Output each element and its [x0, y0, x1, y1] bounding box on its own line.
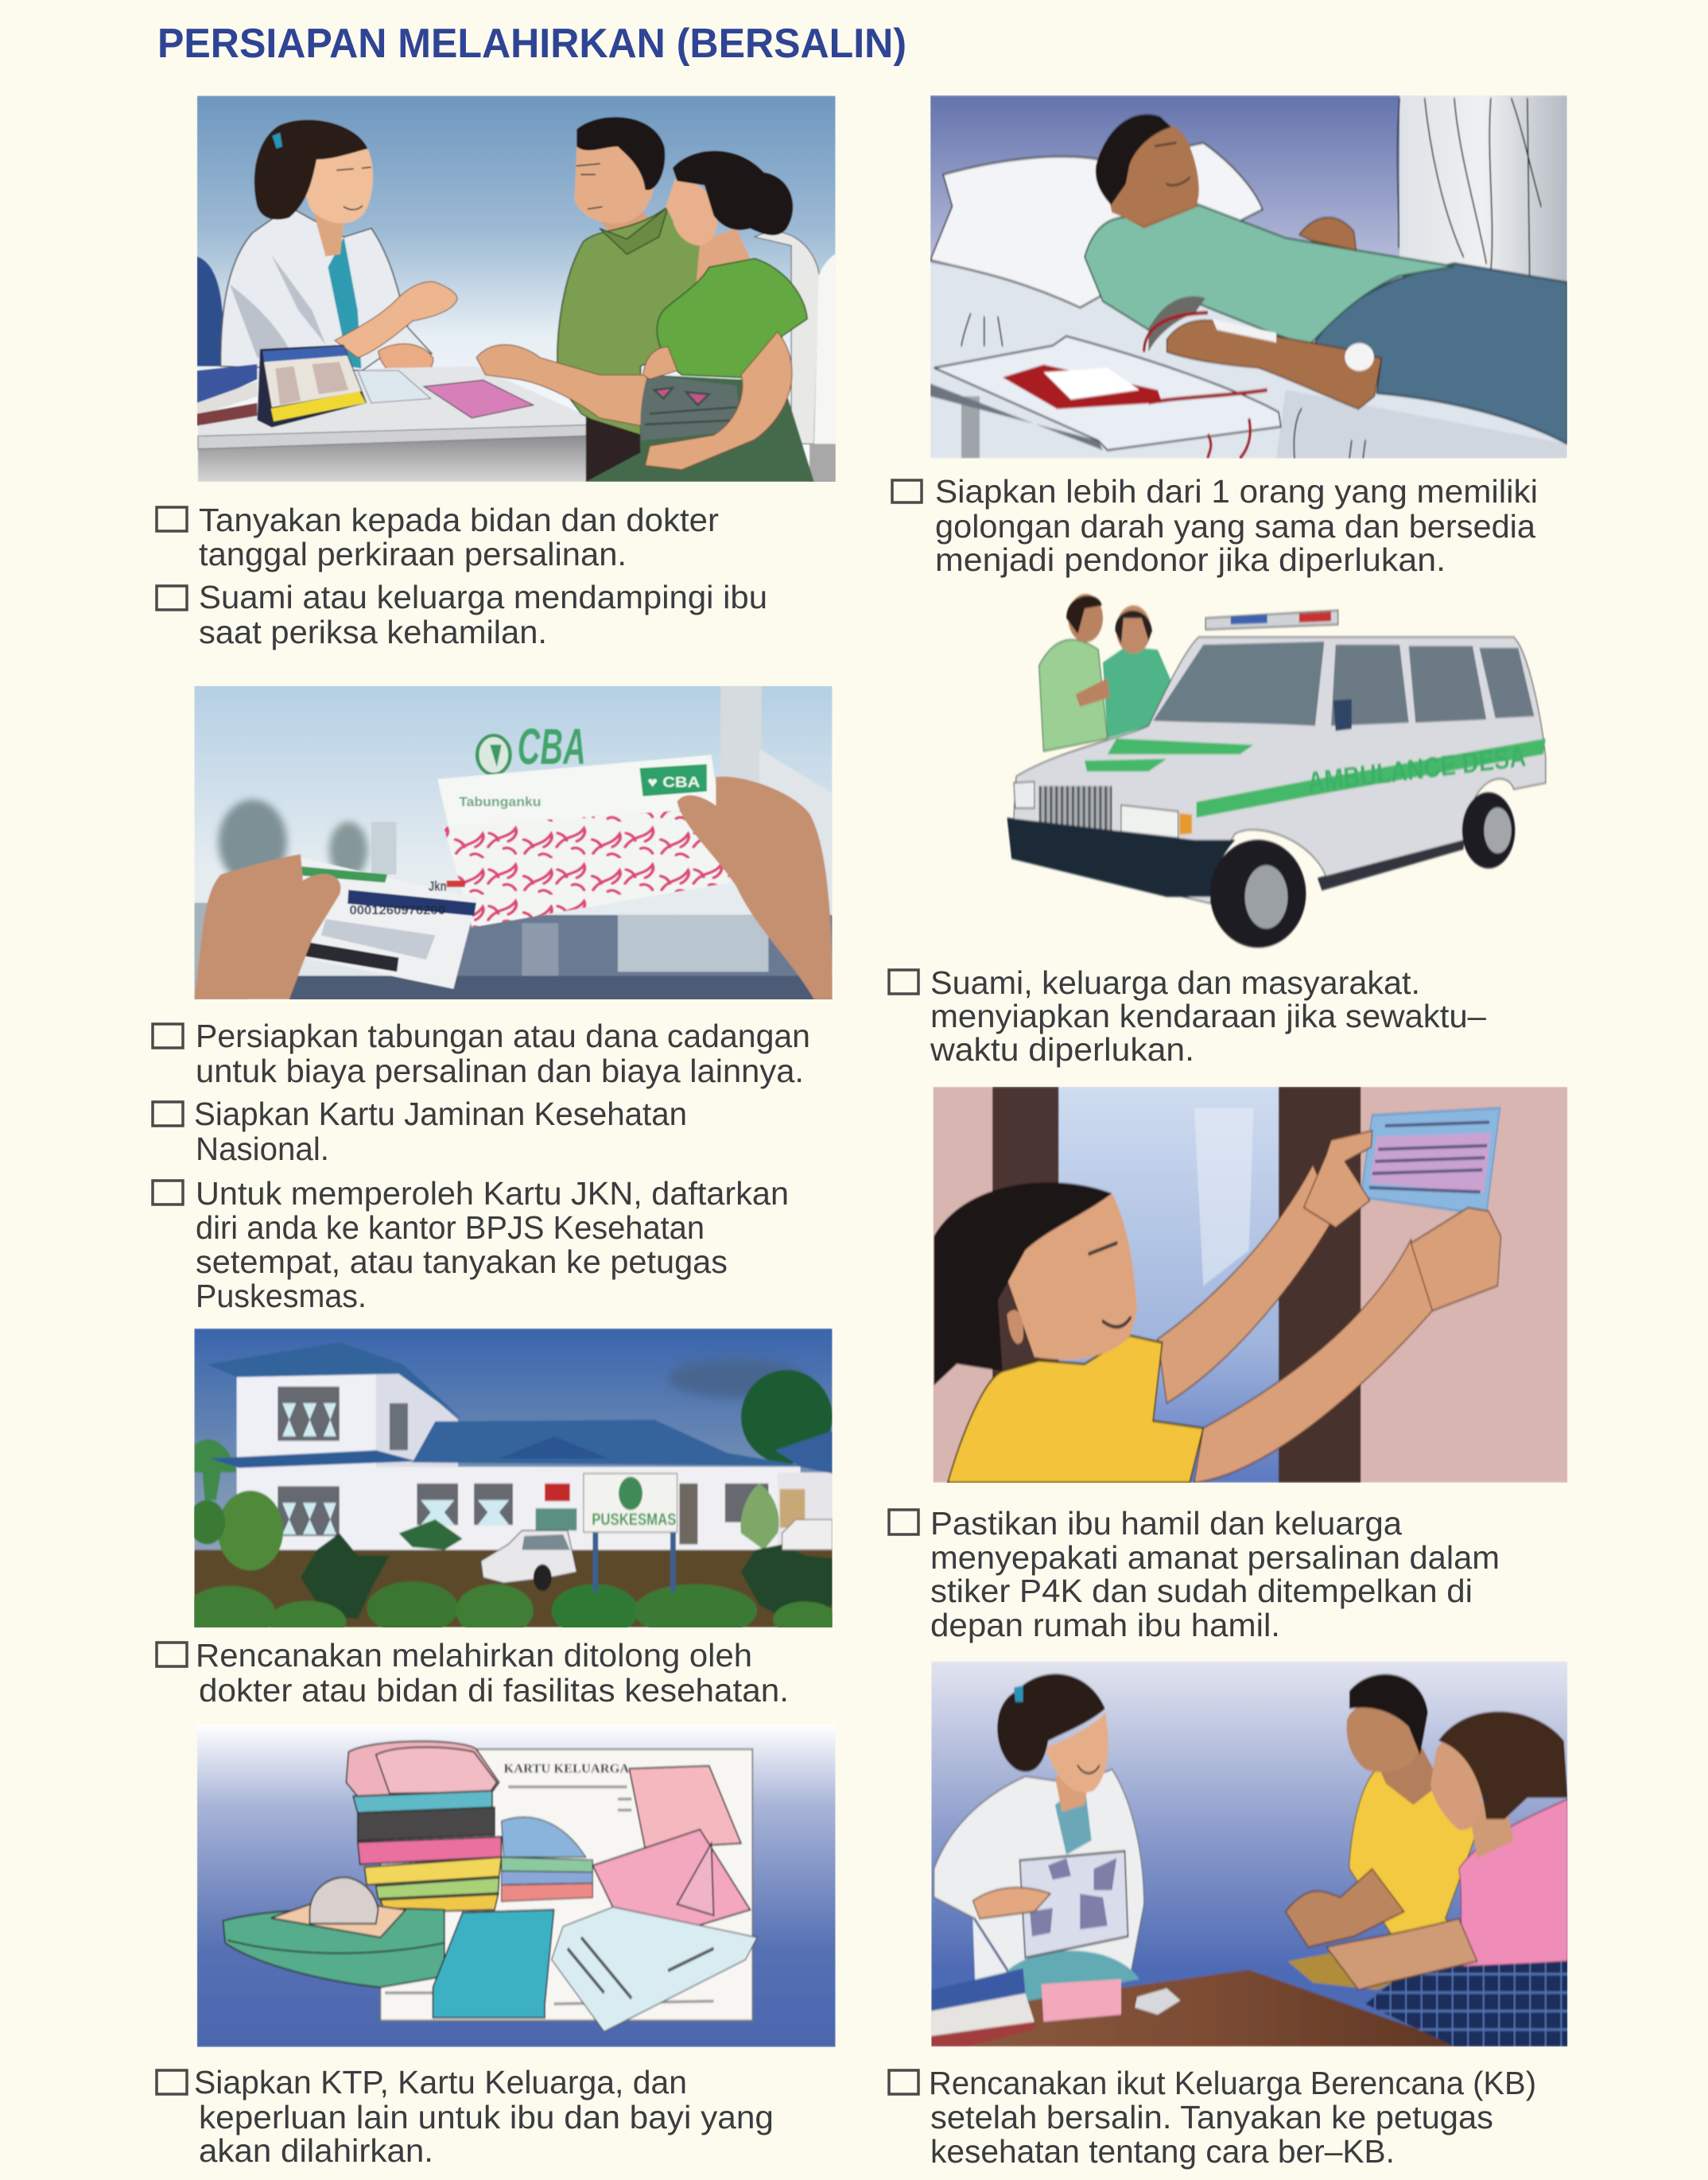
checklist: pendonor darah: golongan darah yang sama dan bersedia — [935, 508, 1535, 545]
checklist: kartu jaminan kesehatan: Nasional. — [196, 1131, 329, 1167]
woman's head and shirt — [934, 1182, 1203, 1483]
checklist: rencanakan melahirkan: Rencanakan melahirkan ditolong oleh — [196, 1637, 752, 1674]
checklist: pendonor darah — [892, 473, 1538, 578]
pillow — [930, 143, 1263, 308]
panel: savings book and JKN card illustration — [194, 686, 833, 1000]
puskesmas sign — [584, 1473, 677, 1592]
panel: woman attaching P4K sticker illustration — [933, 1087, 1567, 1483]
checklist: keluarga berencana: setelah bersalin. Tanyakan ke petugas — [930, 2099, 1493, 2135]
donor figure — [1085, 114, 1567, 444]
checklist: kendaraan: menyiapkan kendaraan jika sewaktu– — [930, 998, 1486, 1034]
desk calendar — [258, 345, 367, 428]
curtain — [1398, 95, 1567, 292]
checklist: stiker P4K: stiker P4K dan sudah ditempelkan di — [930, 1573, 1473, 1609]
panel: blood donor illustration — [930, 95, 1567, 459]
pregnant wife figure — [586, 151, 814, 482]
doctor with flip chart — [934, 1674, 1144, 2004]
ambulance: AMBULANCE DESA — [1306, 739, 1527, 799]
bed sheet — [930, 263, 1567, 459]
checklist: kartu JKN — [153, 1175, 789, 1314]
checklist: rencanakan melahirkan: dokter atau bidan di fasilitas kesehatan. — [199, 1672, 789, 1709]
checklist: tanyakan tanggal persalinan: Tanyakan kepada bidan dan dokter — [199, 502, 719, 538]
hand left — [194, 854, 341, 999]
checklist: kartu JKN: setempat, atau tanyakan ke petugas — [196, 1243, 728, 1280]
doctor figure — [221, 120, 457, 379]
checklist: kendaraan — [889, 964, 1486, 1068]
green towel with baby hat — [223, 1877, 444, 1988]
teal folded cloth — [433, 1910, 554, 2018]
ground and plants — [184, 1484, 837, 1643]
checklist: kartu JKN: diri anda ke kantor BPJS Kesehatan — [196, 1209, 705, 1246]
checklist: kendaraan: Suami, keluarga dan masyarakat. — [930, 964, 1420, 1001]
checklist: kartu JKN: Puskesmas. — [196, 1278, 367, 1314]
kartu keluarga document — [380, 1749, 752, 2020]
checklist: keluarga berencana: kesehatan tentang cara ber–KB. — [930, 2133, 1395, 2170]
savings book: Tabunganku — [459, 794, 542, 809]
checklist: KTP dan keperluan bayi: akan dilahirkan. — [199, 2132, 433, 2169]
windows — [278, 1387, 805, 1544]
checklist: KTP dan keperluan bayi: Siapkan KTP, Kartu Keluarga, dan — [194, 2064, 687, 2100]
pink cloths — [592, 1766, 750, 1945]
checklist: suami mendampingi ibu: Suami atau keluarga mendampingi ibu — [199, 579, 767, 615]
white car — [481, 1519, 833, 1591]
panel: documents and baby clothes illustration — [197, 1724, 836, 2047]
savings book — [437, 754, 730, 927]
checklist: pendonor darah: menjadi pendonor jika diperlukan. — [935, 541, 1446, 578]
panel: puskesmas building illustration — [184, 1329, 837, 1643]
checklist: rencanakan melahirkan — [157, 1637, 789, 1709]
checklist: kendaraan: waktu diperlukan. — [930, 1031, 1194, 1068]
checklist: stiker P4K: depan rumah ibu hamil. — [930, 1607, 1280, 1643]
JKN card — [293, 857, 477, 989]
husband figure — [476, 117, 714, 482]
checklist: suami mendampingi ibu — [157, 579, 767, 650]
panel: family planning counseling illustration — [931, 1662, 1567, 2046]
woman's arms — [1158, 1131, 1501, 1483]
checklist: tanyakan tanggal persalinan — [157, 502, 719, 572]
checklist: KTP dan keperluan bayi — [157, 2064, 774, 2169]
bank sign: CBA — [518, 720, 586, 775]
JKN card: 0001260976200 — [349, 904, 445, 917]
illustration: family and village ambulance — [1007, 594, 1546, 948]
checklist: tabungan — [153, 1018, 810, 1089]
blue pillow and folded cloths — [502, 1817, 592, 1902]
hand right — [677, 777, 833, 999]
ambulance — [1007, 611, 1546, 948]
P4K sticker — [1361, 1108, 1500, 1215]
desk — [198, 367, 607, 482]
panel: consultation with midwife illustration — [197, 95, 837, 483]
main building walls — [237, 1370, 833, 1555]
JKN card: Jkn — [429, 878, 447, 894]
checklist: KTP dan keperluan bayi: keperluan lain untuk ibu dan bayi yang — [199, 2099, 774, 2135]
tray with blood bag — [930, 312, 1281, 459]
checklist: suami mendampingi ibu: saat periksa kehamilan. — [199, 614, 547, 650]
checklist: stiker P4K — [889, 1505, 1500, 1643]
checklist: stiker P4K: Pastikan ibu hamil dan keluarga — [930, 1505, 1402, 1542]
checklist: pendonor darah: Siapkan lebih dari 1 orang yang memiliki — [935, 473, 1538, 510]
checklist: tabungan: untuk biaya persalinan dan biaya lainnya. — [196, 1053, 804, 1089]
checklist: keluarga berencana: Rencanakan ikut Keluarga Berencana (KB) — [929, 2065, 1536, 2101]
puskesmas sign: PUSKESMAS — [592, 1511, 677, 1530]
KTP card — [552, 1907, 757, 2031]
checklist: stiker P4K: menyepakati amanat persalinan dalam — [930, 1539, 1500, 1576]
table with books and box — [931, 1969, 1468, 2046]
checklist: tanyakan tanggal persalinan: tanggal perkiraan persalinan. — [199, 536, 627, 572]
checklist: kartu jaminan kesehatan — [153, 1096, 687, 1167]
wife — [1326, 1712, 1567, 2046]
bank sign — [475, 727, 584, 776]
kartu keluarga document: KARTU KELUARGA — [503, 1762, 630, 1776]
blue roofs — [207, 1342, 833, 1473]
books — [197, 364, 258, 425]
husband — [1286, 1674, 1484, 1990]
checklist: kartu jaminan kesehatan: Siapkan Kartu Jaminan Kesehatan — [194, 1096, 687, 1132]
title: PERSIAPAN MELAHIRKAN (BERSALIN) — [157, 21, 906, 67]
savings book: ♥ CBA — [647, 774, 700, 791]
checklist: kartu JKN: Untuk memperoleh Kartu JKN, daftarkan — [196, 1175, 789, 1212]
couple beside ambulance — [1039, 594, 1171, 751]
checklist: keluarga berencana — [889, 2065, 1536, 2170]
checklist: tabungan: Persiapkan tabungan atau dana cadangan — [196, 1018, 810, 1054]
cloth stack — [346, 1741, 502, 1913]
